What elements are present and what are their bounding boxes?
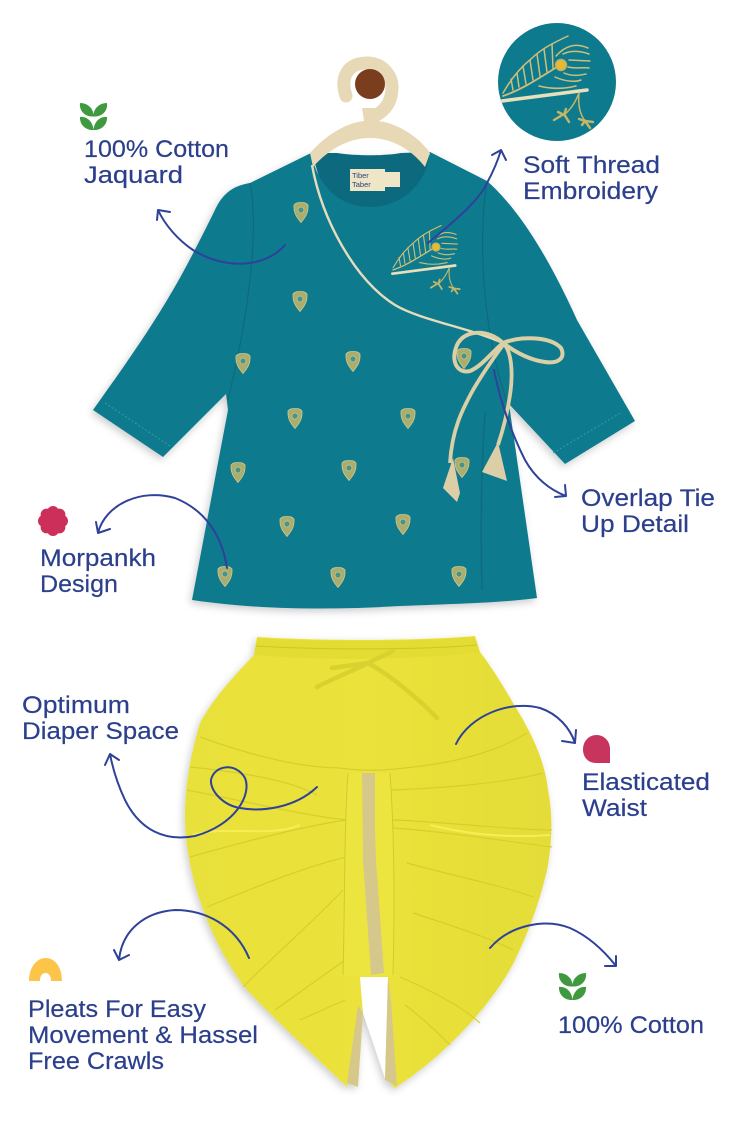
overlap tie cord and tassels	[312, 165, 563, 502]
text: soft thread embroidery: Embroidery	[523, 178, 659, 205]
text: morpankh design	[40, 545, 156, 598]
neck label	[350, 169, 400, 191]
text: elasticated waist	[582, 769, 710, 822]
text: overlap tie up detail: Overlap Tie	[581, 485, 715, 512]
text: 100% cotton jaquard	[84, 136, 229, 189]
elasticated waistband	[254, 637, 479, 659]
text: pleats: Free Crawls	[28, 1048, 164, 1075]
callout arrow: morpankh	[96, 495, 227, 568]
feather embroidery on chest	[392, 226, 460, 294]
callout arrow: embroidery	[428, 150, 506, 243]
neck label: Taber	[352, 180, 371, 189]
icon: crimson flower	[38, 506, 68, 536]
text: pleats	[28, 996, 258, 1075]
callout arrow: diaper space	[105, 754, 317, 838]
kurta	[93, 152, 635, 608]
dhoti	[185, 636, 552, 1088]
text: morpankh design: Design	[40, 571, 118, 598]
neck label: Tiber	[352, 171, 369, 180]
hanger	[310, 63, 430, 167]
text: 100% cotton: 100% Cotton	[558, 1012, 704, 1039]
text: overlap tie up detail	[581, 485, 715, 538]
text: soft thread embroidery: Soft Thread	[523, 152, 660, 179]
text: elasticated waist: Waist	[582, 795, 647, 822]
callout arrow: pleats	[114, 910, 249, 960]
callout arrow: jaquard	[157, 210, 285, 264]
icon: green leaves top	[80, 103, 107, 130]
embroidered motifs	[218, 202, 471, 588]
dhoti body	[185, 636, 551, 1088]
kurta back neck	[312, 152, 430, 215]
icon: wooden knob	[355, 69, 385, 99]
drawstring bow	[317, 651, 437, 718]
text: 100% cotton jaquard: Jaquard	[84, 162, 183, 189]
icon: green leaves bottom	[559, 973, 586, 1000]
text: pleats: Pleats For Easy	[28, 996, 207, 1023]
icon: yellow arch	[29, 958, 62, 981]
text: morpankh design: Morpankh	[40, 545, 156, 572]
text: 100% cotton jaquard: 100% Cotton	[84, 136, 229, 163]
callout arrow: overlap tie	[494, 370, 566, 497]
text: optimum diaper space	[22, 692, 179, 745]
kurta body and sleeves	[93, 152, 635, 608]
centre front panel	[343, 773, 394, 977]
gold trim strip	[362, 773, 384, 975]
text: overlap tie up detail: Up Detail	[581, 511, 689, 538]
callout arrow: cotton	[490, 924, 616, 966]
text: elasticated waist: Elasticated	[582, 769, 710, 796]
pleat lines	[187, 733, 552, 1045]
text: soft thread embroidery	[523, 152, 660, 205]
text: pleats: Movement & Hassel	[28, 1022, 258, 1049]
white leg gap	[360, 977, 388, 1078]
icon: crimson drop	[583, 735, 610, 763]
text: optimum diaper space: Optimum	[22, 692, 130, 719]
text: optimum diaper space: Diaper Space	[22, 718, 179, 745]
inset: embroidery detail circle	[498, 23, 616, 141]
callout arrow: elasticated waist	[456, 706, 576, 744]
